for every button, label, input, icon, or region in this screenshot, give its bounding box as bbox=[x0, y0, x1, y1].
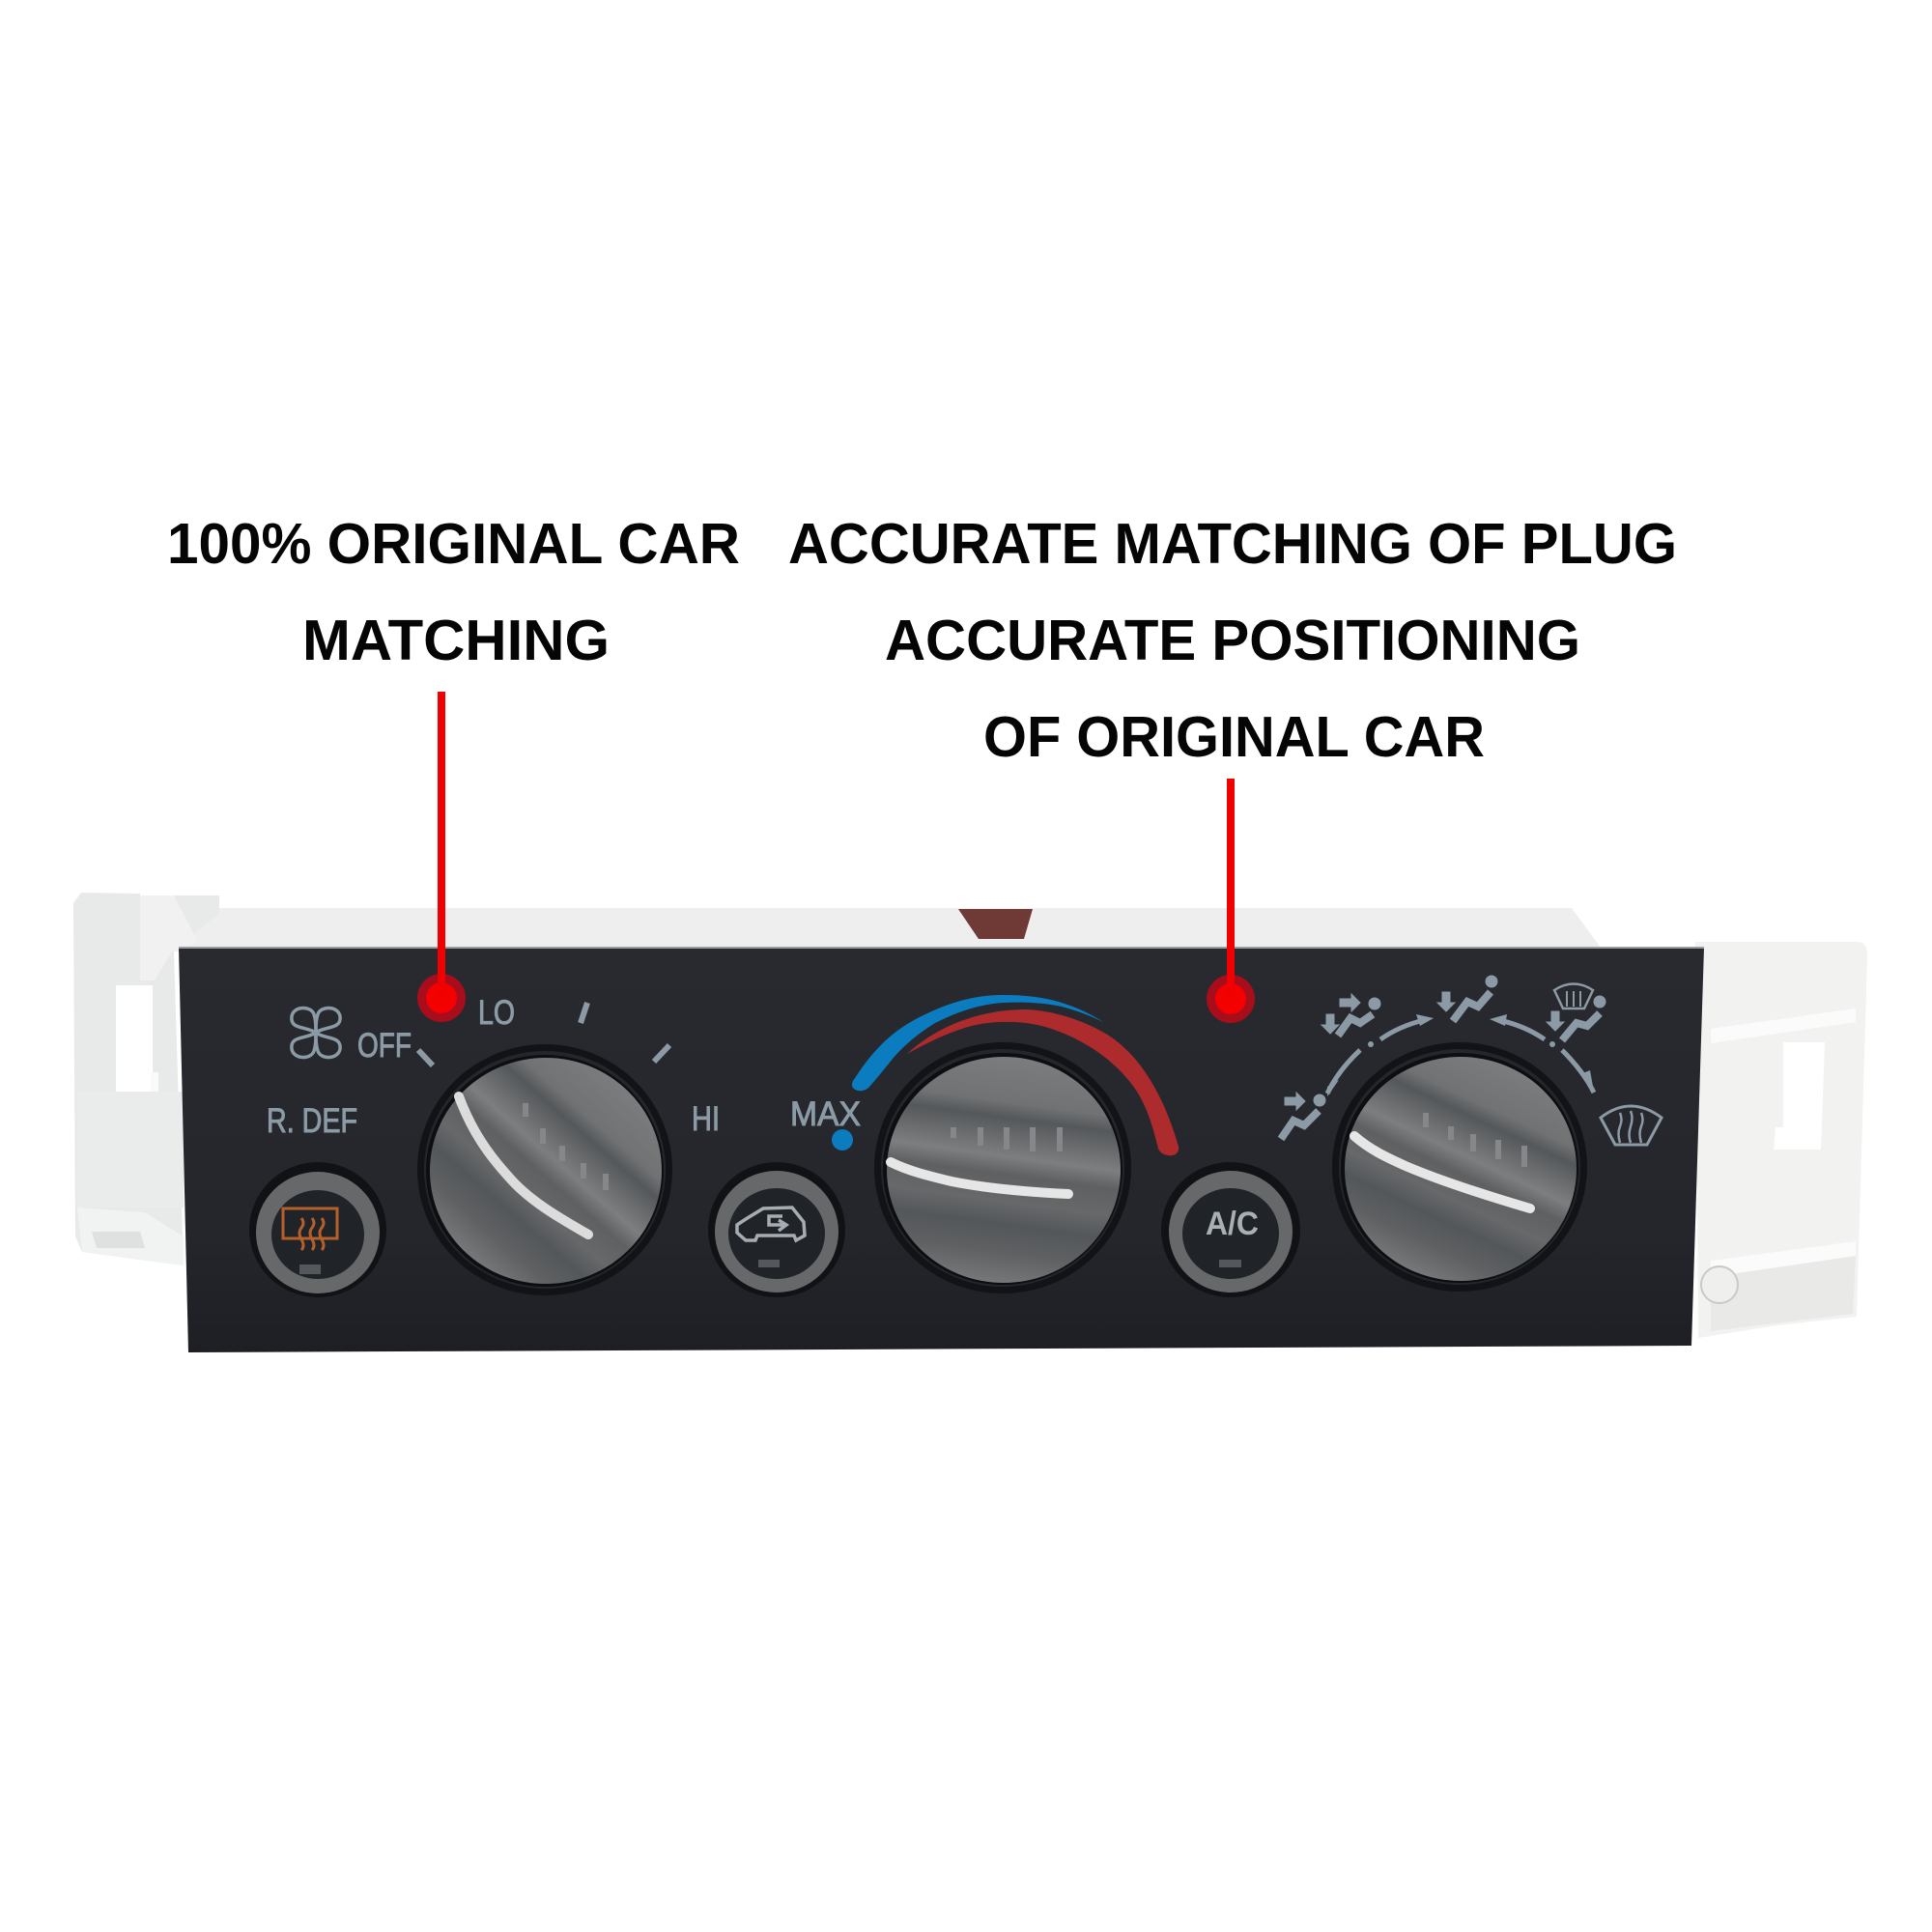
knob: temperature bbox=[874, 1042, 1131, 1293]
button: A/C bbox=[1161, 1162, 1300, 1297]
button: recirculation bbox=[708, 1162, 845, 1297]
panel: black faceplate bbox=[179, 948, 1704, 1352]
label: MAX: MAX bbox=[790, 1095, 861, 1133]
mode arrowheads and dots bbox=[1327, 1014, 1594, 1096]
label: LO: LO bbox=[478, 994, 515, 1032]
heading: right callout: ACCURATE MATCHING OF PLUG bbox=[788, 512, 1677, 576]
icon: floor mode bbox=[1437, 976, 1497, 1021]
label: OFF: OFF bbox=[357, 1027, 412, 1065]
icon: bi-level mode bbox=[1321, 994, 1380, 1036]
heading: left callout bbox=[167, 512, 740, 672]
label: R. DEF: R. DEF bbox=[267, 1102, 357, 1140]
label: HI: HI bbox=[692, 1100, 720, 1138]
callout pin: left bbox=[417, 692, 466, 1022]
heading: left callout: MATCHING bbox=[302, 609, 610, 672]
icon: MAX dot bbox=[832, 1129, 853, 1151]
mode arcs and arrows bbox=[1327, 1020, 1594, 1094]
callout pin: right bbox=[1207, 779, 1255, 1023]
icon: vent mode bbox=[1281, 1093, 1325, 1139]
temperature arc: blue bbox=[852, 995, 1103, 1091]
button: A/C: A/C bbox=[1206, 1206, 1259, 1242]
knob: fan speed bbox=[417, 1044, 672, 1295]
temperature arc: red bbox=[907, 1009, 1179, 1155]
icon: blend mode bbox=[1547, 983, 1605, 1040]
heading: right callout: OF ORIGINAL CAR bbox=[983, 705, 1485, 769]
heading: left callout: 100% ORIGINAL CAR bbox=[167, 512, 740, 576]
heading: right callout bbox=[788, 512, 1677, 769]
icon: defrost mode bbox=[1601, 1106, 1662, 1145]
icon: fan bbox=[292, 1008, 340, 1058]
knob: air mode bbox=[1332, 1042, 1587, 1292]
heading: right callout: ACCURATE POSITIONING bbox=[885, 609, 1580, 672]
housing: white plastic body and brackets bbox=[73, 893, 1867, 1338]
button: rear defrost bbox=[249, 1162, 386, 1297]
fan speed ticks bbox=[418, 1003, 669, 1065]
